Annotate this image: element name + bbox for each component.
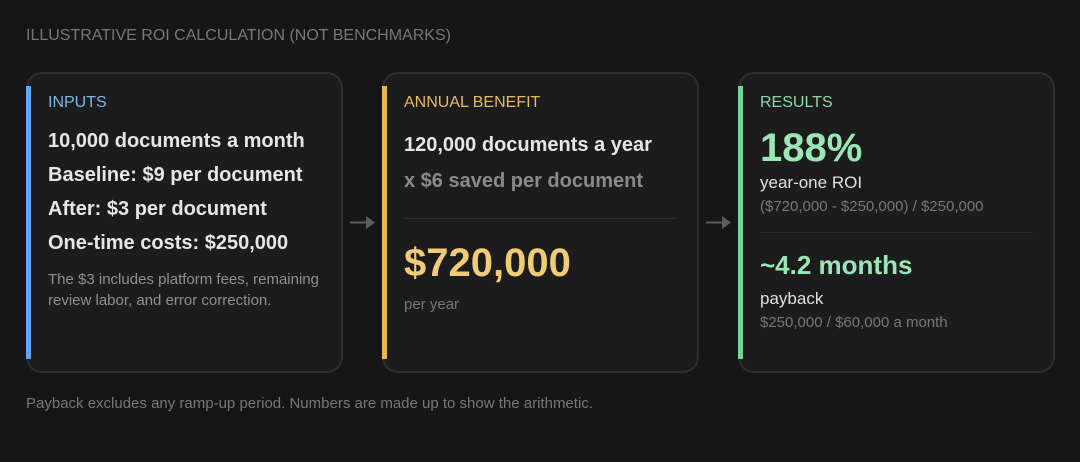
payback label: payback bbox=[760, 289, 823, 308]
panel: results bbox=[738, 72, 1055, 373]
results accent bar bbox=[738, 86, 743, 359]
input: baseline cost: Baseline: $9 per document bbox=[48, 164, 303, 186]
inputs heading: INPUTS bbox=[48, 94, 107, 111]
panel: inputs bbox=[26, 72, 343, 373]
inputs accent bar bbox=[26, 86, 31, 359]
footnote: Payback excludes any ramp-up period. Numbers are made up to show the arithmetic. bbox=[26, 395, 593, 412]
payback formula: $250,000 / $60,000 a month bbox=[760, 314, 948, 331]
per year label: per year bbox=[404, 296, 459, 313]
saving per document: x $6 saved per document bbox=[404, 170, 643, 192]
panel: annual benefit bbox=[382, 72, 699, 373]
inputs note: The $3 includes platform fees, remaining bbox=[48, 271, 319, 288]
title: ILLUSTRATIVE ROI CALCULATION (NOT BENCHMARKS) bbox=[26, 27, 451, 44]
input: one-time costs: One-time costs: $250,000 bbox=[48, 232, 288, 254]
payback value: ~4.2 months bbox=[760, 250, 912, 280]
annual benefit heading: ANNUAL BENEFIT bbox=[404, 94, 540, 111]
annual benefit accent bar bbox=[382, 86, 387, 359]
input: after cost: After: $3 per document bbox=[48, 198, 267, 220]
input: documents per month: 10,000 documents a month bbox=[48, 130, 305, 152]
ROI value: 188% bbox=[760, 126, 862, 170]
arrow: inputs to annual benefit bbox=[350, 216, 375, 229]
annual benefit value: $720,000 bbox=[404, 241, 571, 285]
inputs note bbox=[48, 271, 319, 309]
inputs note: review labor, and error correction. bbox=[48, 292, 271, 309]
arrow: annual benefit to results bbox=[706, 216, 731, 229]
documents per year: 120,000 documents a year bbox=[404, 134, 652, 156]
ROI formula: ($720,000 - $250,000) / $250,000 bbox=[760, 198, 984, 215]
results heading: RESULTS bbox=[760, 94, 833, 111]
ROI label: year-one ROI bbox=[760, 173, 862, 192]
